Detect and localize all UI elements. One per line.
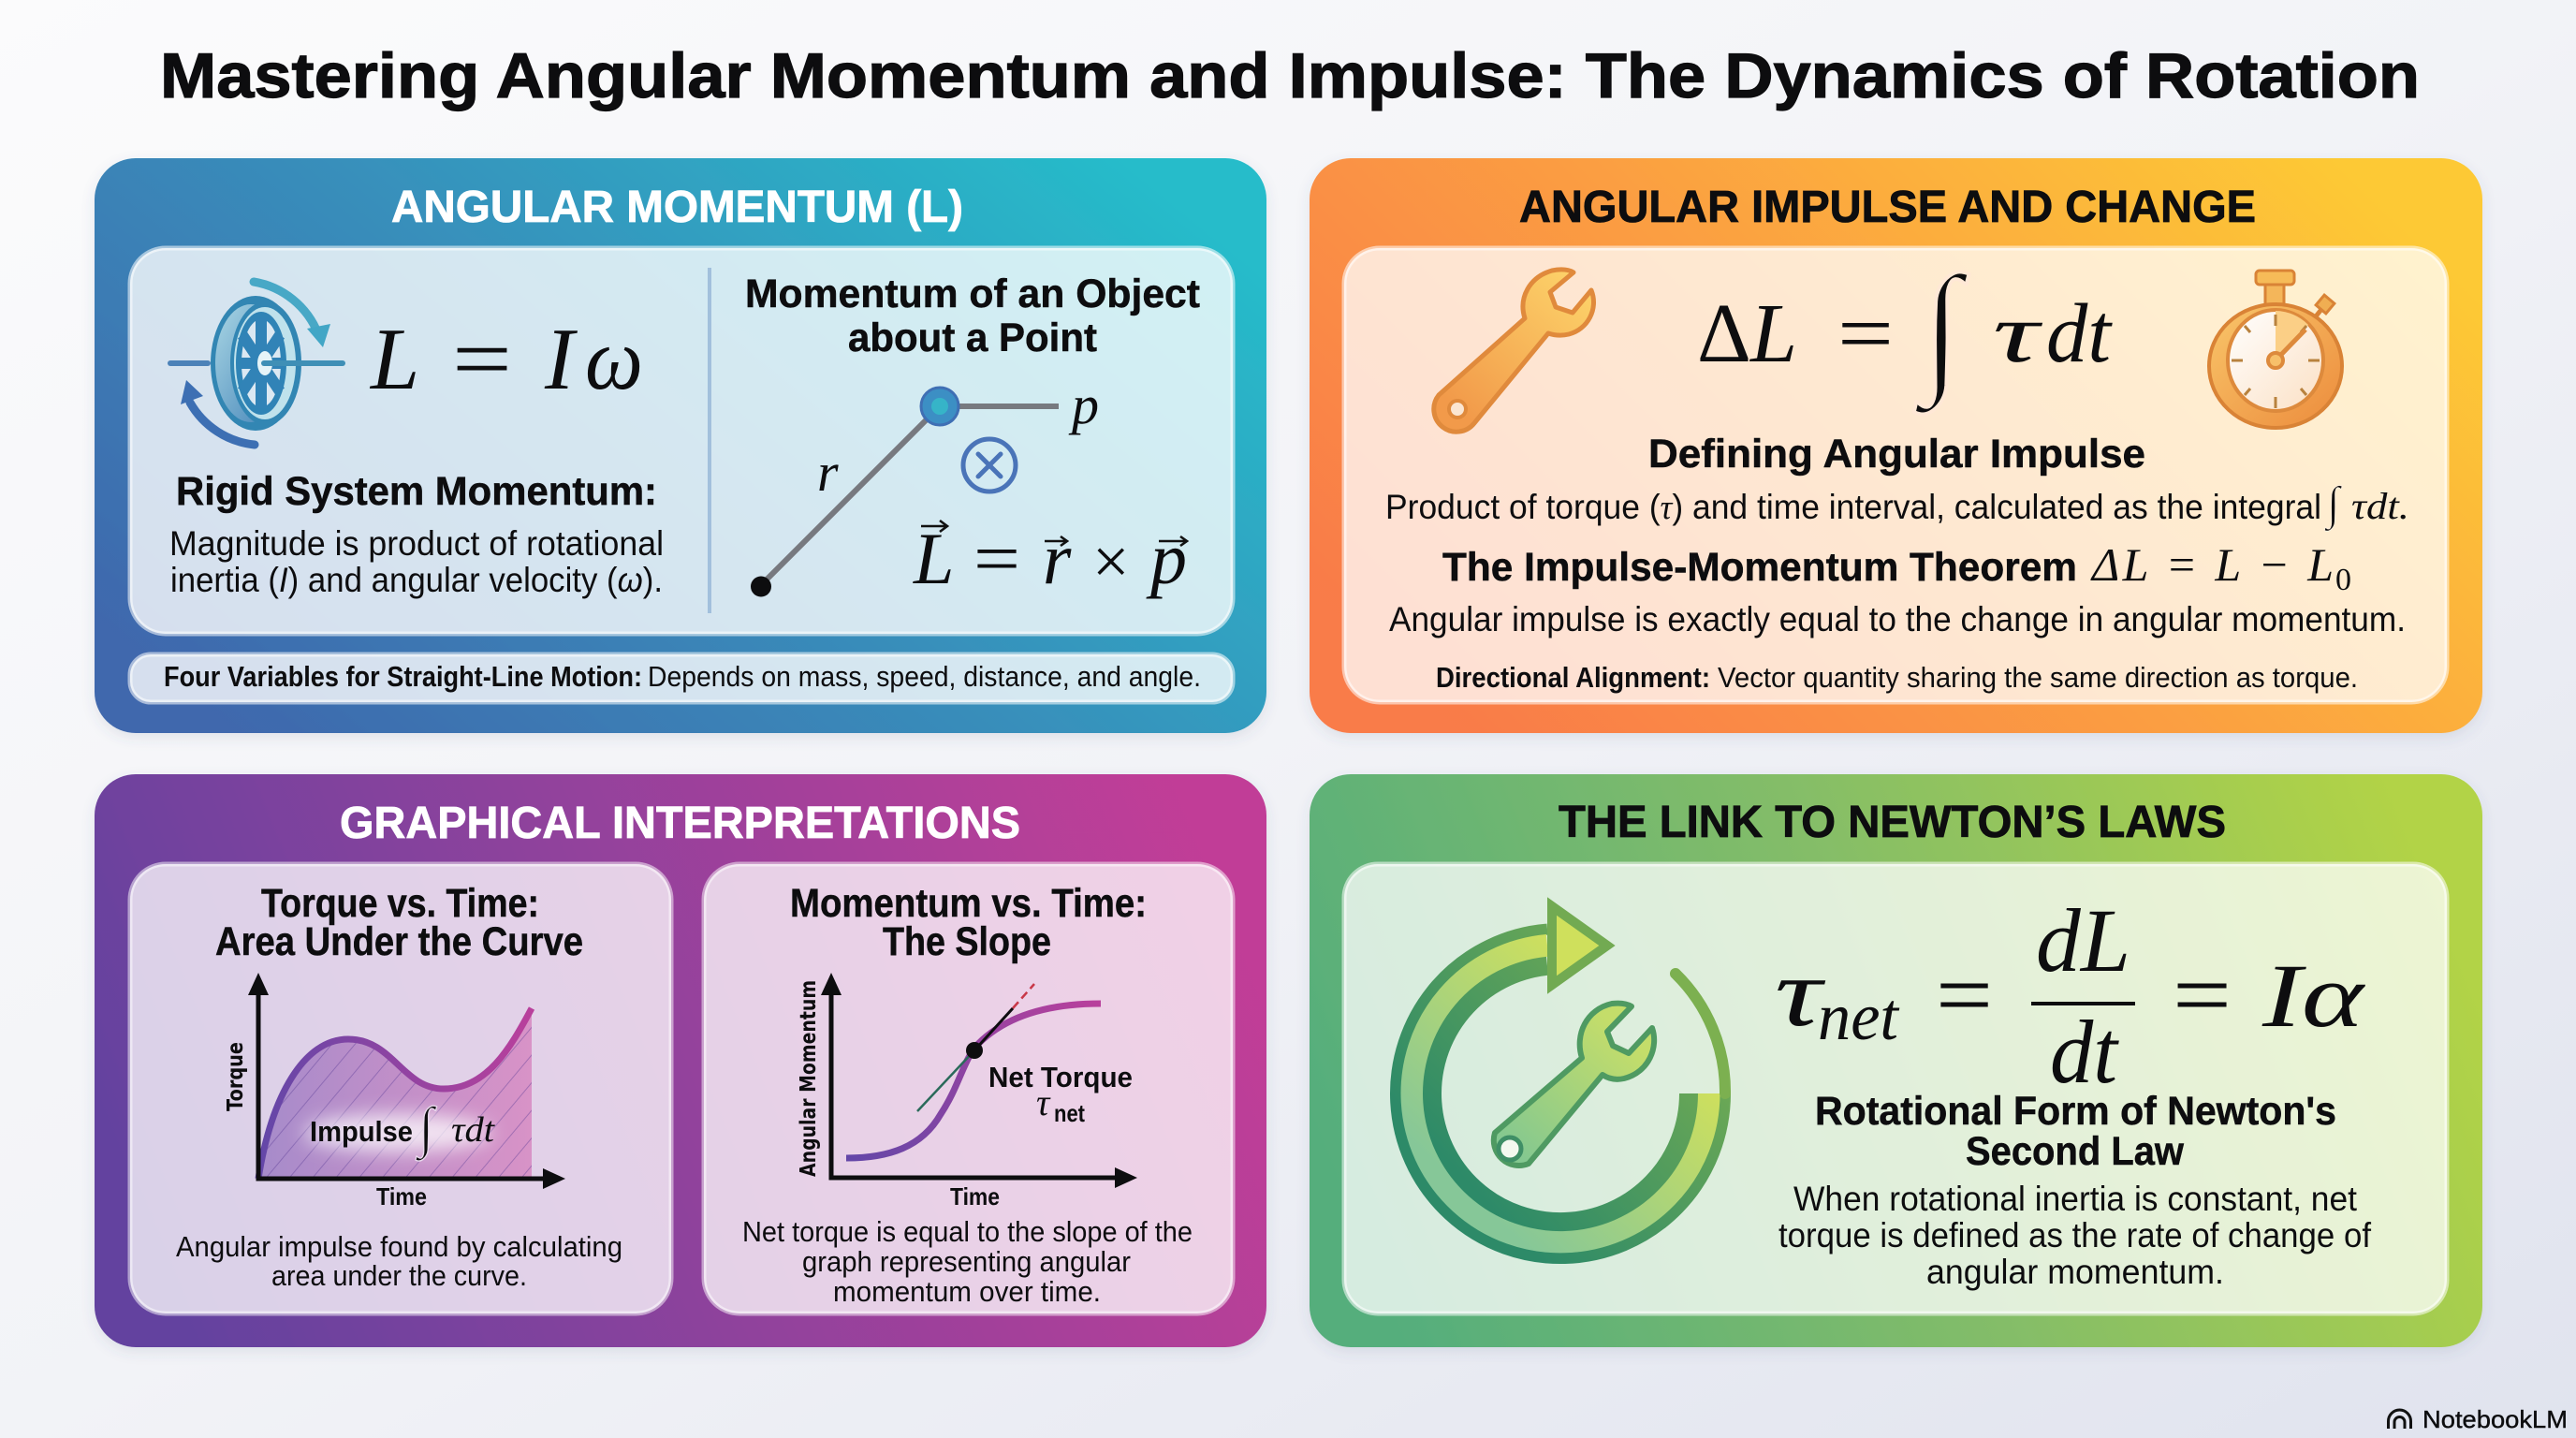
formula: L = I omega: I <box>544 311 578 408</box>
heading: momentum of an object <box>745 271 1200 360</box>
text: directional alignment: Vector quantity sharing the same direction as torque. <box>1718 661 2358 694</box>
formula: L = I omega: L <box>369 311 419 408</box>
chart: torque area under curve <box>224 973 565 1211</box>
icon: wrench <box>1434 270 1594 432</box>
formula: L = r x p: p <box>1146 518 1187 599</box>
formula: delta L integral <box>1697 246 2113 415</box>
text: rigid system description: Magnitude is product of rotational <box>169 524 664 563</box>
formula: net torque: τ <box>1775 939 1826 1047</box>
text: slope caption: Net torque is equal to the slope of the <box>742 1215 1193 1248</box>
text: rotational form heading: Rotational Form of Newton's <box>1815 1089 2336 1134</box>
divider <box>708 268 711 613</box>
text: defining angular impulse: Defining Angular Impulse <box>1648 432 2145 477</box>
formula: L = r x p: = <box>973 518 1020 599</box>
text: impulse definition: ∫ <box>2324 477 2343 532</box>
chart: torque area under curve: Torque <box>224 1042 248 1111</box>
text: impulse definition <box>1385 477 2409 532</box>
text: newton description <box>1778 1180 2372 1291</box>
formula: delta L integral: τ <box>1993 287 2042 380</box>
text: slope caption: graph representing angular <box>802 1245 1131 1278</box>
text: impulse-momentum theorem: ΔL = L − L <box>2090 538 2334 591</box>
heading: torque vs time <box>215 881 583 964</box>
formula: L = I omega: ω <box>585 311 643 408</box>
text: newton description: torque is defined as the rate of change of <box>1778 1216 2372 1255</box>
text: impulse-momentum theorem <box>1442 538 2351 597</box>
heading: momentum vs time <box>790 881 1147 964</box>
text: theorem description: Angular impulse is exactly equal to the change in angular momentum. <box>1389 600 2406 638</box>
formula: net torque <box>1775 890 2365 1102</box>
text: rigid system momentum: Rigid System Momentum: <box>176 469 657 514</box>
callout: four variables <box>130 654 1233 702</box>
card: torque vs time <box>130 864 671 1313</box>
heading: angular impulse: ANGULAR IMPULSE AND CHANGE <box>1519 183 2256 232</box>
formula: L = r x p: L <box>913 518 954 599</box>
formula: net torque: Iα <box>2261 946 2365 1046</box>
diagram: r and p vectors: p <box>1068 374 1099 435</box>
formula: delta L integral: dt <box>2046 287 2113 380</box>
formula: L = r x p: × <box>1092 526 1129 598</box>
formula: net torque: dt <box>2050 1002 2119 1102</box>
heading: momentum vs time: The Slope <box>883 919 1051 964</box>
heading: torque vs time: Torque vs. Time: <box>261 881 539 926</box>
text: impulse-momentum theorem: 0 <box>2335 563 2351 597</box>
inner card: angular impulse <box>1344 248 2447 702</box>
text: slope caption <box>742 1215 1193 1308</box>
watermark: notebooklm: NotebookLM <box>2422 1405 2568 1433</box>
text: impulse definition: τdt. <box>2351 485 2409 527</box>
formula: delta L integral: = <box>1837 287 1894 380</box>
title: Mastering Angular Momentum and Impulse: The Dynamics of Rotation <box>160 40 2420 111</box>
panel: the link to newton's laws <box>1310 774 2482 1347</box>
text: rigid system description <box>169 524 664 599</box>
chart: torque area under curve: Time <box>376 1182 427 1211</box>
callout: four variables: Four Variables for Straight-Line Motion: <box>164 660 642 693</box>
inner card: newton's laws <box>1344 864 2447 1313</box>
chart: momentum slope: Net Torque <box>988 1061 1133 1093</box>
formula: L = r x p <box>913 518 1187 599</box>
text: newton description: When rotational inertia is constant, net <box>1793 1180 2358 1218</box>
text: area caption: Angular impulse found by calculating <box>176 1230 622 1263</box>
formula: delta L integral: L <box>1749 287 1797 380</box>
text: rigid system description: inertia (I) and angular velocity (ω). <box>170 561 663 599</box>
formula: net torque: dL <box>2036 890 2130 990</box>
chart: torque area under curve: ∫ <box>416 1096 437 1162</box>
icon: wrench in rotation arrow <box>1396 906 1725 1258</box>
formula: L = I omega: = <box>452 311 512 408</box>
formula: net torque: = <box>2173 943 2232 1047</box>
text: impulse definition: Product of torque (τ) and time interval, calculated as the integral <box>1385 488 2321 527</box>
formula: net torque: = <box>1936 943 1993 1047</box>
text: directional alignment <box>1436 661 2358 694</box>
heading: graphical interpretations: GRAPHICAL INTERPRETATIONS <box>340 799 1020 848</box>
heading: momentum of an object: about a Point <box>848 315 1097 360</box>
chart: momentum slope <box>797 973 1137 1211</box>
text: slope caption: momentum over time. <box>833 1275 1101 1308</box>
panel: graphical interpretations <box>95 774 1266 1347</box>
inner card: angular momentum <box>130 248 1233 634</box>
heading: newton's laws: THE LINK TO NEWTON’S LAWS <box>1559 798 2226 847</box>
formula: L = I omega <box>369 311 643 408</box>
heading: momentum of an object: Momentum of an Object <box>745 271 1200 316</box>
formula: delta L integral: Δ <box>1697 287 1751 380</box>
icon: rotating wheel <box>170 282 343 445</box>
text: impulse-momentum theorem: The Impulse-Momentum Theorem <box>1442 545 2077 590</box>
heading: momentum vs time: Momentum vs. Time: <box>790 881 1147 926</box>
formula: delta L integral: ∫ <box>1914 246 1969 415</box>
text: area caption: area under the curve. <box>271 1259 527 1292</box>
diagram: r and p vectors: r <box>817 442 839 503</box>
chart: torque area under curve: τdt <box>451 1110 496 1150</box>
text: area caption <box>176 1230 622 1292</box>
chart: momentum slope: Time <box>950 1182 1000 1211</box>
card: momentum vs time <box>704 864 1233 1313</box>
chart: momentum slope: Angular Momentum <box>797 980 821 1177</box>
chart: momentum slope: τ <box>1036 1081 1051 1123</box>
heading: torque vs time: Area Under the Curve <box>215 919 583 964</box>
callout: four variables: Depends on mass, speed, distance, and angle. <box>648 660 1201 693</box>
panel: angular impulse and change <box>1310 158 2482 733</box>
formula: net torque: net <box>1818 979 1900 1054</box>
chart: momentum slope: net <box>1054 1099 1085 1127</box>
chart: torque area under curve: Impulse <box>310 1115 413 1148</box>
text: newton description: angular momentum. <box>1926 1253 2224 1291</box>
formula: L = r x p: r <box>1043 518 1072 599</box>
text: rotational form heading: Second Law <box>1966 1129 2185 1174</box>
panel: angular momentum <box>95 158 1266 733</box>
heading: angular momentum: ANGULAR MOMENTUM (L) <box>391 183 963 232</box>
text: directional alignment: Directional Alignment: <box>1436 661 1710 694</box>
diagram: r and p vectors <box>751 374 1099 597</box>
icon: stopwatch <box>2209 271 2342 428</box>
text: rotational form heading <box>1815 1089 2336 1174</box>
